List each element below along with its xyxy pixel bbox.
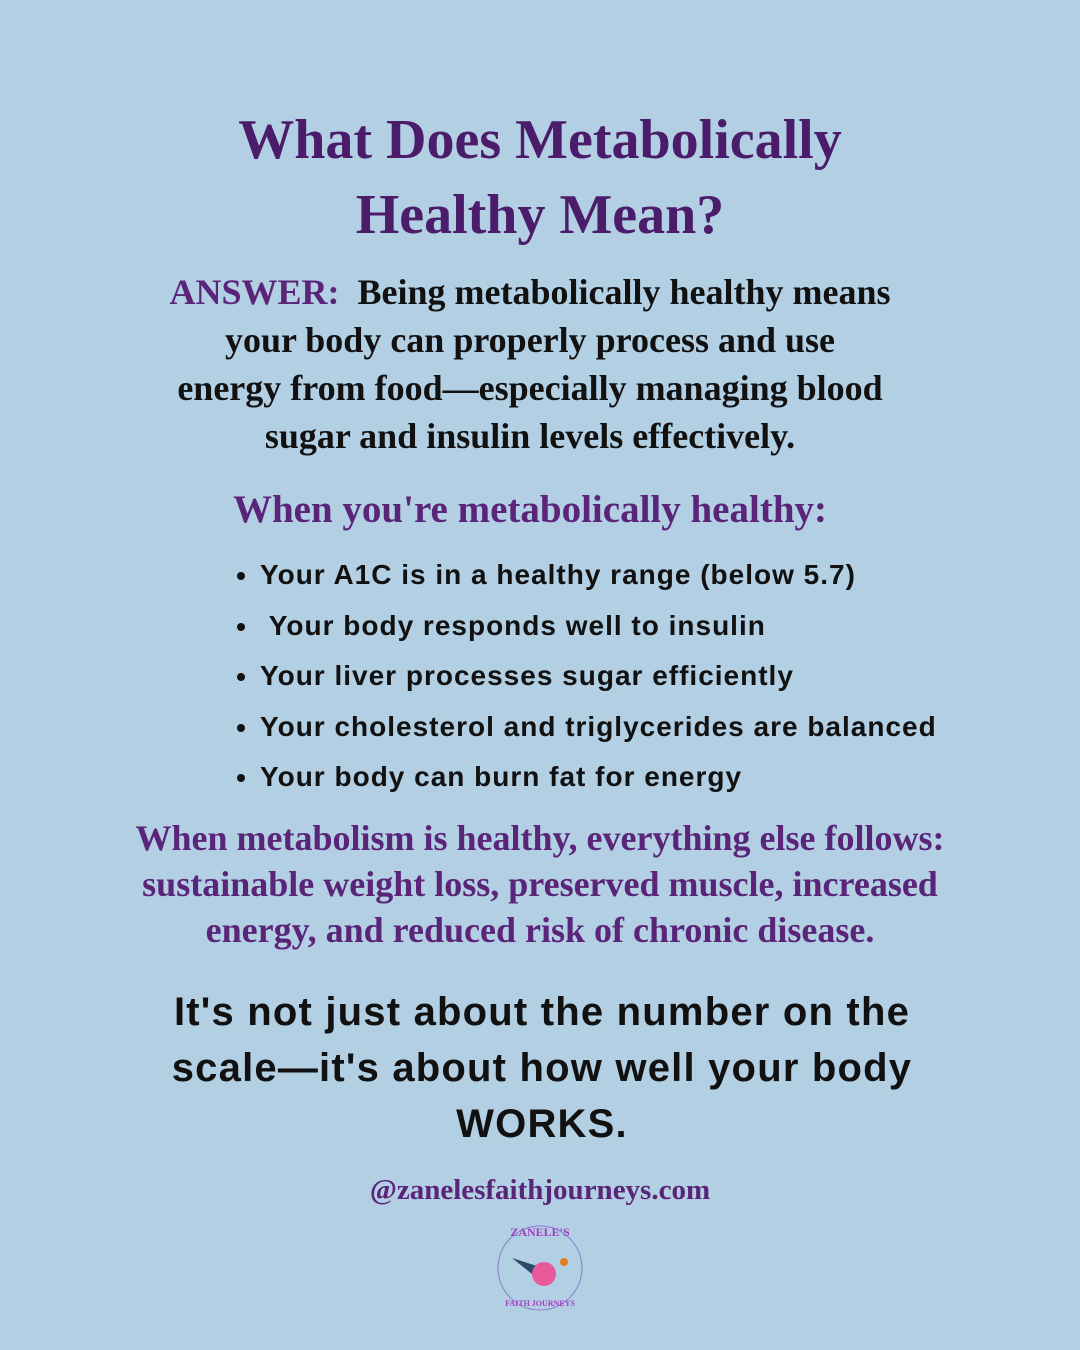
answer text: sugar and insulin levels effectively. <box>265 416 795 456</box>
logo: ZANELE'S <box>510 1225 570 1239</box>
bullet list: Your body responds well to insulin <box>269 610 766 640</box>
bullet list: Your cholesterol and triglycerides are balanced <box>260 710 937 742</box>
bullet list <box>237 559 937 792</box>
purple summary <box>136 818 944 950</box>
key statement: It's not just about the number on the <box>174 990 910 1034</box>
subheading: When you're metabolically healthy: <box>233 488 827 531</box>
answer text <box>169 272 890 456</box>
logo: FAITH JOURNEYS <box>505 1299 575 1308</box>
key statement: WORKS. <box>456 1102 628 1146</box>
bullet list: Your body can burn fat for energy <box>260 761 742 792</box>
key statement: scale—it's about how well your body <box>172 1046 912 1090</box>
logo <box>498 1225 582 1310</box>
title: Healthy Mean? <box>356 184 724 246</box>
purple summary: sustainable weight loss, preserved muscle, increased <box>142 864 938 904</box>
bullet list: Your A1C is in a healthy range (below 5.7) <box>260 559 856 590</box>
website handle: @zanelesfaithjourneys.com <box>370 1174 710 1206</box>
answer text: your body can properly process and use <box>225 320 835 360</box>
answer text: ANSWER: Being metabolically healthy means <box>169 272 890 312</box>
purple summary: When metabolism is healthy, everything else follows: <box>136 818 944 858</box>
purple summary: energy, and reduced risk of chronic disease. <box>206 910 874 950</box>
title: What Does Metabolically <box>238 109 842 171</box>
bullet list: Your liver processes sugar efficiently <box>260 660 794 691</box>
title <box>238 109 842 246</box>
answer text: energy from food—especially managing blood <box>177 368 883 408</box>
key statement <box>172 990 912 1146</box>
